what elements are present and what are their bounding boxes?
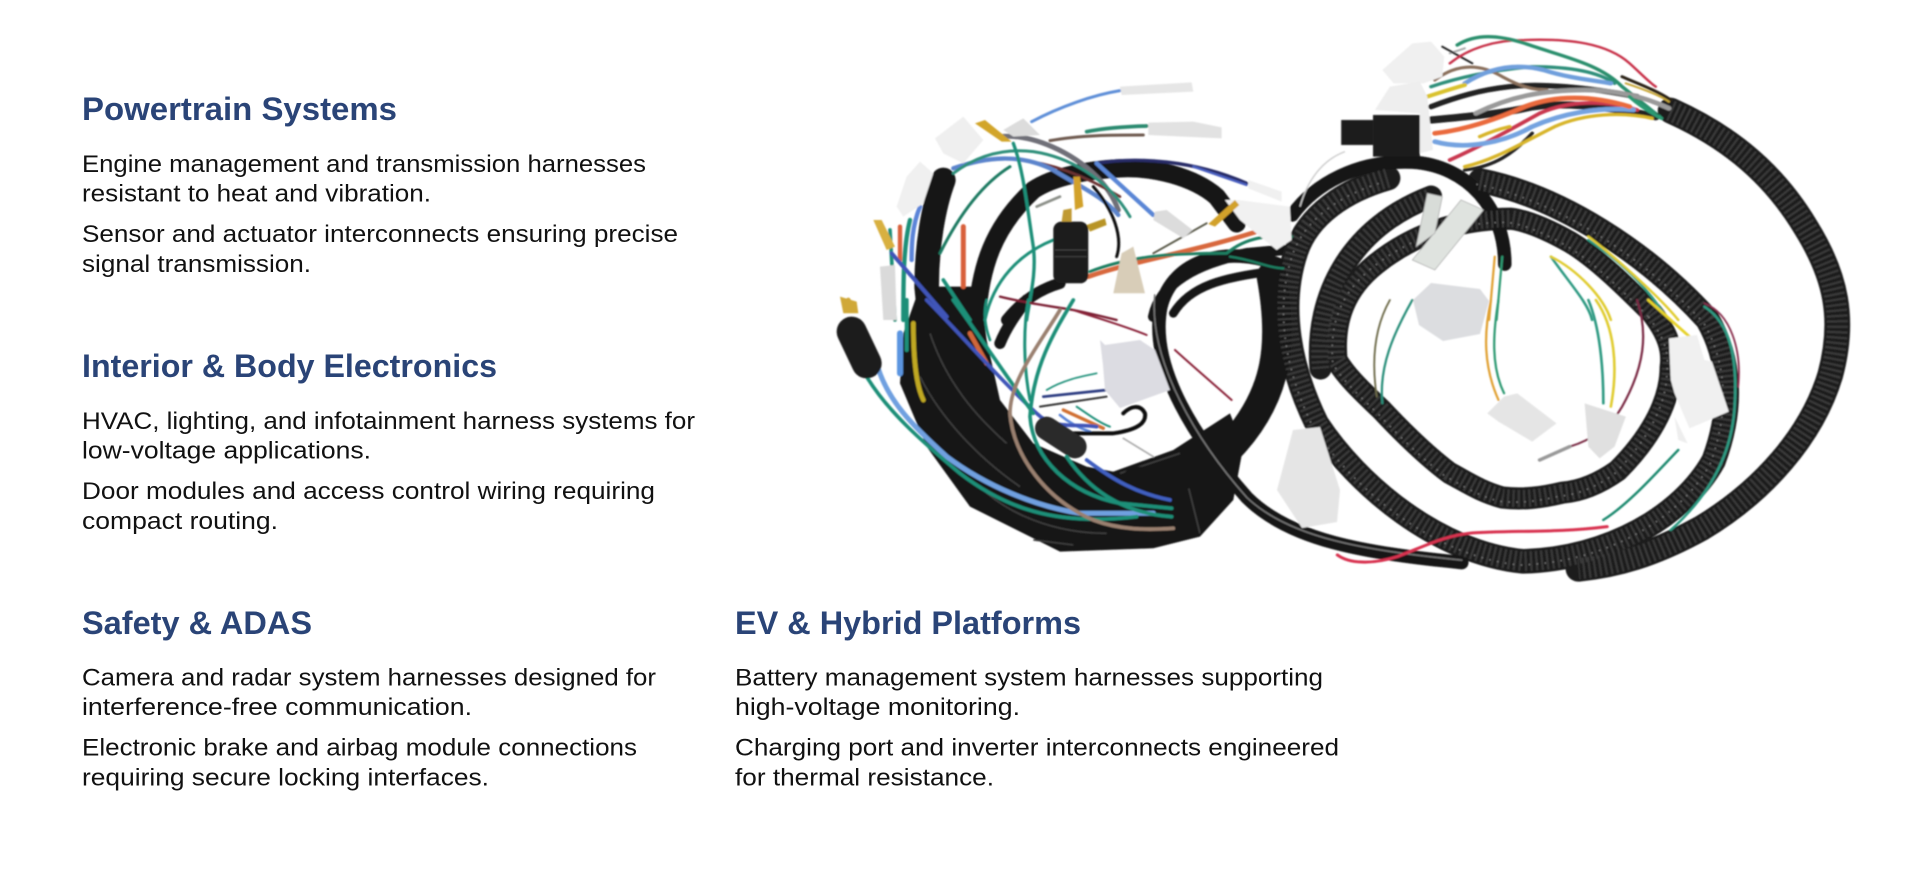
panel: powertrain systems <box>82 91 678 278</box>
text block: battery management: high-voltage monitoring. <box>735 694 1020 721</box>
text block: hvac: HVAC, lighting, and infotainment harness systems for <box>82 408 695 435</box>
text block: door modules: Door modules and access control wiring requiring <box>82 478 655 505</box>
illustration: wire harness <box>840 37 1837 569</box>
black corrugated tubes <box>1136 111 1837 569</box>
text block: brake and airbag <box>82 734 637 792</box>
text block: hvac <box>82 408 695 464</box>
black mass: left bundle <box>900 287 1243 552</box>
heading: interior and body electronics: Interior & Body Electronics <box>82 348 497 384</box>
text block: hvac: low-voltage applications. <box>82 438 371 464</box>
text block: brake and airbag: requiring secure locking interfaces. <box>82 764 489 792</box>
text block: sensor interconnects: Sensor and actuator interconnects ensuring precise <box>82 221 678 248</box>
wires: left harness lower <box>848 300 1232 529</box>
heading: ev and hybrid platforms: EV & Hybrid Platforms <box>735 605 1081 641</box>
text block: battery management <box>735 664 1323 721</box>
connector: white block, inside loop <box>1413 283 1489 341</box>
text block: engine management: resistant to heat and vibration. <box>82 180 431 208</box>
text block: door modules: compact routing. <box>82 508 278 535</box>
text block: engine management: Engine management and transmission harnesses <box>82 151 646 178</box>
text block: engine management <box>82 151 646 208</box>
text block: charging port: for thermal resistance. <box>735 764 994 792</box>
text block: camera and radar: Camera and radar system harnesses designed for <box>82 664 656 692</box>
text block: battery management: Battery management system harnesses supporting <box>735 664 1323 692</box>
connector: white block, lower left <box>1100 340 1170 408</box>
text block: brake and airbag: Electronic brake and airbag module connections <box>82 734 637 762</box>
panel: safety and adas <box>82 605 656 792</box>
text block: door modules <box>82 478 655 535</box>
black tubes: left bundle upper arcs <box>927 168 1283 320</box>
text block: camera and radar <box>82 664 656 721</box>
terminals and connectors: left harness upper <box>840 82 1292 320</box>
wires: right harness bundle <box>1427 37 1678 320</box>
heading: powertrain systems: Powertrain Systems <box>82 91 397 127</box>
heading: safety and adas: Safety & ADAS <box>82 605 312 641</box>
connectors: top of right harness <box>1300 42 1484 270</box>
text block: charging port <box>735 734 1339 792</box>
text block: camera and radar: interference-free communication. <box>82 694 472 721</box>
text block: sensor interconnects: signal transmission. <box>82 251 311 278</box>
wires and connectors: right harness lower <box>1337 300 1739 562</box>
wires: left harness upper <box>890 91 1292 320</box>
panel: ev and hybrid platforms <box>735 605 1339 792</box>
connector: clear sleeve, centre bottom <box>1277 427 1340 528</box>
text block: charging port: Charging port and inverter interconnects engineered <box>735 734 1339 762</box>
text block: sensor interconnects <box>82 221 678 278</box>
panel: interior and body electronics <box>82 348 695 535</box>
